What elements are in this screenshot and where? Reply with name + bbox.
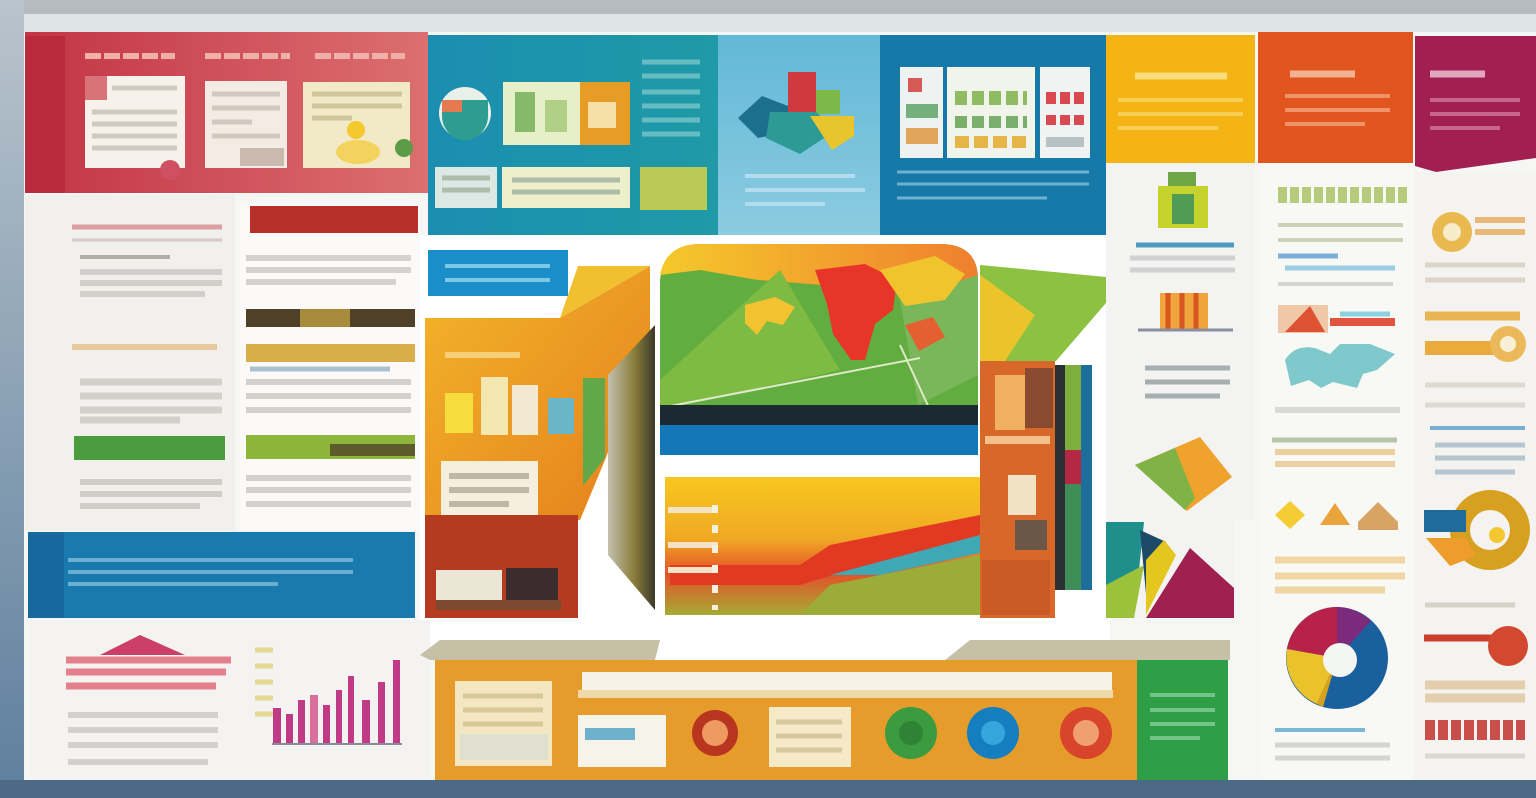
bar chart bbox=[273, 660, 400, 744]
icon: green circle bbox=[885, 707, 937, 759]
panel: teal header bbox=[428, 35, 718, 235]
icon: mini bars bbox=[445, 377, 574, 435]
icon: metallic cylinder bbox=[608, 325, 655, 610]
panel: right column A bbox=[1262, 163, 1413, 780]
chart: green heading bbox=[1278, 187, 1408, 203]
panel: bottom orange band bbox=[420, 640, 1230, 780]
card: blue panel right bbox=[1040, 67, 1090, 158]
icon: gears top bbox=[1432, 212, 1525, 252]
panel: orange header bbox=[1258, 32, 1413, 163]
panel: blue banner bbox=[28, 532, 415, 618]
panel: yellow header bbox=[1106, 35, 1255, 163]
panel: second document column bbox=[240, 203, 420, 530]
panel: multi-colour fold bbox=[1106, 520, 1235, 618]
card: red panel middle bbox=[205, 81, 287, 168]
icon: red circle bbox=[692, 710, 738, 756]
colored strip bbox=[1055, 365, 1092, 590]
card: teal charts bbox=[503, 82, 630, 145]
icon: orange-red circle bbox=[1060, 707, 1112, 759]
card: blue panel middle bbox=[947, 67, 1035, 158]
panel: white icon column bbox=[1106, 163, 1255, 520]
card: red panel left bbox=[85, 76, 185, 168]
dark band bbox=[246, 309, 415, 327]
card: note bbox=[441, 461, 538, 516]
icon: isometric blocks bbox=[738, 72, 854, 154]
icon: teal shield bbox=[439, 87, 491, 140]
ring chart bbox=[1424, 500, 1520, 566]
bottom frame edge bbox=[0, 780, 1536, 798]
card: teal lower row bbox=[435, 167, 707, 210]
panel: orange tower bbox=[980, 360, 1092, 618]
icon: house heading bbox=[66, 635, 231, 686]
donut chart bbox=[1286, 607, 1388, 709]
panel: right column B bbox=[1415, 172, 1536, 780]
panel: bottom-left charts bbox=[30, 620, 430, 780]
panel: left document bbox=[25, 195, 235, 531]
panel: orange column bbox=[425, 266, 650, 520]
green bar bbox=[74, 436, 225, 460]
teal map bbox=[1285, 344, 1395, 388]
icon: orange bars bbox=[1160, 293, 1208, 329]
white title bar bbox=[582, 672, 1112, 690]
red band bbox=[250, 206, 418, 233]
small icons row bbox=[1275, 501, 1398, 530]
card: blue panel left bbox=[900, 67, 943, 158]
card: note middle bbox=[578, 715, 666, 767]
panel: blue header with cards bbox=[880, 35, 1106, 235]
map continents bbox=[745, 256, 965, 360]
red marker bbox=[1424, 626, 1528, 666]
card: note left bbox=[455, 681, 552, 766]
small scene bbox=[1278, 305, 1395, 333]
panel: red-brown photo bbox=[425, 515, 578, 618]
icon: blue circle bbox=[967, 707, 1019, 759]
green gradient band bbox=[246, 435, 415, 459]
panel: map bbox=[660, 244, 978, 455]
dark horizon bbox=[660, 405, 978, 427]
panel: green callout bbox=[1137, 660, 1228, 780]
card: red panel right bbox=[303, 82, 413, 168]
gold band bbox=[246, 344, 415, 362]
panel: magenta header bbox=[1415, 36, 1536, 172]
label: blue tag bbox=[428, 250, 568, 296]
icon: green bag bbox=[1158, 172, 1208, 228]
blue water bbox=[660, 425, 978, 455]
icon: tilted tag bbox=[1135, 437, 1232, 511]
panel: sunset chart bbox=[665, 477, 980, 615]
panel: red header bbox=[25, 32, 428, 193]
icon: gears row bbox=[1425, 316, 1526, 362]
panel: sky blue cubes bbox=[718, 35, 880, 235]
card: note right bbox=[769, 707, 851, 767]
panel: green triangle bbox=[980, 265, 1106, 361]
